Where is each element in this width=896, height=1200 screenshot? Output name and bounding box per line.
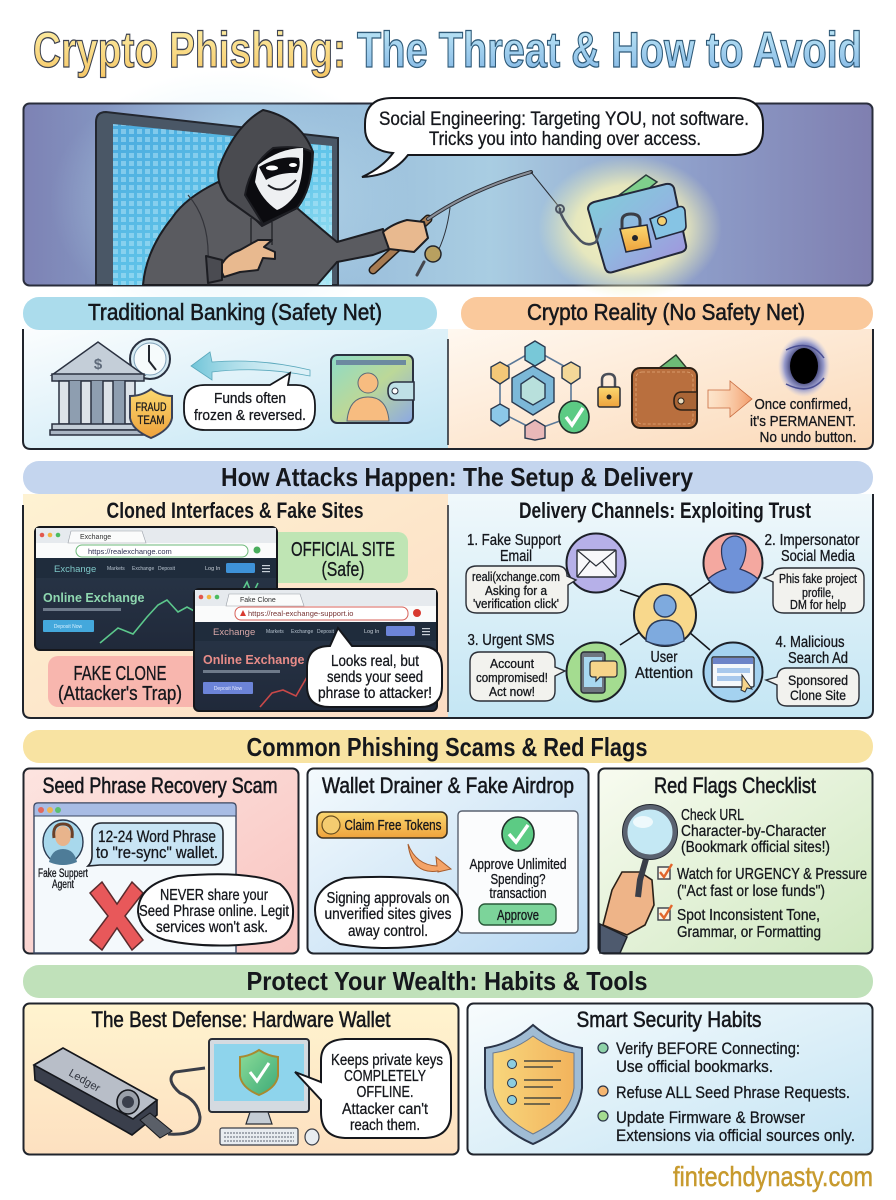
habit 1: Verify BEFORE Connecting: (616, 1039, 800, 1058)
item: watch for urgency: ("Act fast or lose funds") (677, 883, 825, 900)
wallet on hook (538, 156, 722, 300)
label: official site (262, 532, 408, 583)
panel: red flags checklist (598, 768, 872, 954)
chat bubble (88, 823, 223, 866)
browser: fake clone: Log In (364, 629, 379, 635)
channel 1: fake support email: 'verification click' (473, 597, 559, 611)
agent label (38, 868, 89, 891)
heading: crypto reality: Crypto Reality (No Safety Net) (527, 299, 805, 325)
callout: signing approvals: Signing approvals on (326, 890, 450, 907)
anonymous mask (255, 148, 303, 210)
green check badge (559, 401, 589, 433)
text: permanent warning: it's PERMANENT. (750, 413, 856, 430)
icon: blue user wallet (331, 355, 414, 423)
callout: funds frozen: frozen & reversed. (194, 407, 306, 424)
habit 3: Update Firmware & Browser (616, 1108, 805, 1127)
channel 1: fake support email: reali(xchange.com (472, 570, 560, 584)
claim free tokens button (317, 812, 447, 838)
connector lines (620, 582, 710, 650)
item: check url: Check URL (681, 807, 744, 824)
icon: computer with shield (209, 1039, 319, 1145)
browser: fake clone (194, 589, 437, 711)
hacker in hoodie (143, 110, 389, 285)
text: user attention: Attention (635, 665, 693, 682)
label: official site: OFFICIAL SITE (291, 539, 395, 561)
icon: brown wallet with cash (632, 355, 697, 428)
channel 2: impersonator social media: Phis fake project (779, 572, 857, 586)
browser: official site: Exchange (132, 566, 154, 572)
channel 3: urgent sms: Act now! (489, 684, 535, 699)
browser: fake clone: https://real-exchange-support.io (248, 609, 353, 618)
icon: shield with list (485, 1025, 582, 1144)
panel title: Seed Phrase Recovery Scam (42, 773, 278, 798)
approval dialog: transaction (490, 886, 546, 902)
callout: keeps keys offline: OFFLINE. (356, 1084, 414, 1101)
habit 1 (598, 1039, 800, 1076)
browser: official site: Online Exchange (43, 591, 144, 605)
icon: bank building: $ (94, 356, 103, 373)
item: watch for urgency (658, 864, 867, 900)
item: spot inconsistent tone: Spot Inconsistent Tone, (677, 907, 820, 924)
browser: official site: Deposit (158, 566, 176, 572)
chat bubble: to "re-sync" wallet. (96, 844, 218, 862)
panel: wallet drainer and fake airdrop (308, 768, 588, 954)
icon: fraud team shield: TEAM (138, 413, 164, 427)
panel: smart security habits (468, 1004, 872, 1154)
item: check url (681, 807, 830, 856)
claim free tokens button: Claim Free Tokens (344, 817, 442, 834)
browser: fake clone: Fake Clone (240, 597, 276, 604)
hook (560, 208, 601, 244)
speech bubble (362, 98, 763, 177)
approval dialog (458, 811, 578, 933)
browser: fake clone: Markets (266, 629, 284, 635)
section heading: common phishing scams: Common Phishing Scams & Red Flags (246, 732, 648, 762)
speech bubble: Tricks you into handing over access. (429, 129, 701, 150)
channel 3: urgent sms (468, 632, 626, 702)
icon: red x (90, 882, 143, 950)
item: spot inconsistent tone (658, 905, 821, 941)
channel 2: impersonator social media: DM for help (790, 598, 846, 612)
callout: looks real (307, 628, 442, 707)
icon: bank building (50, 342, 146, 435)
habit 2: Refuse ALL Seed Phrase Requests. (616, 1083, 850, 1102)
text: permanent warning: No undo button. (760, 429, 856, 446)
browser: official site (35, 527, 277, 650)
browser: official site: Exchange (80, 534, 111, 541)
approval dialog: Approve Unlimited (470, 857, 566, 873)
subheading: delivery channels: Delivery Channels: Exploiting Trust (519, 498, 812, 523)
browser: official site: Deposit Now (54, 624, 83, 630)
label: official site: (Safe) (322, 559, 364, 581)
icon: blockchain network (491, 341, 589, 440)
channel 2: impersonator social media: 2. Impersonator (764, 532, 860, 549)
callout: keeps keys offline: Keeps private keys (331, 1052, 443, 1069)
browser: official site: Log In (205, 566, 220, 572)
callout: funds frozen: Funds often (214, 390, 286, 407)
fishing rod (373, 172, 560, 275)
section heading: protect your wealth: Protect Your Wealth: Habits & Tools (246, 966, 648, 996)
channel 3: urgent sms: Account (490, 656, 534, 671)
habit 1: Use official bookmarks. (616, 1057, 773, 1076)
label: fake clone: (Attacker's Trap) (58, 683, 182, 705)
text: permanent warning (750, 396, 856, 446)
icon: black hole (778, 335, 830, 397)
arrow: funds reversed (191, 352, 310, 380)
channel 4: malicious search ad: 4. Malicious (776, 634, 845, 651)
channel 4: malicious search ad: Search Ad (788, 650, 848, 667)
text: permanent warning: Once confirmed, (754, 396, 852, 413)
callout: keeps keys offline (295, 1039, 451, 1138)
channel 2: impersonator social media: Social Media (781, 548, 855, 565)
icon: ledger device (34, 1048, 172, 1138)
callout: keeps keys offline: Attacker can't (342, 1101, 428, 1118)
title (33, 22, 862, 78)
item: check url: (Bookmark official sites!) (681, 839, 830, 856)
icon: user attention (634, 584, 696, 646)
browser: fake clone: Deposit (317, 629, 335, 635)
arrow: to black hole (708, 381, 752, 417)
browser: official site: Exchange (54, 564, 96, 575)
label: fake clone (48, 656, 208, 707)
usb cable (168, 1068, 205, 1134)
browser: fake clone: Exchange (291, 629, 313, 635)
panel: hardware wallet (24, 1004, 458, 1154)
panel: how attacks happen (23, 461, 873, 718)
arrow: to approval dialog (408, 844, 451, 872)
callout: keeps keys offline: COMPLETELY (344, 1068, 426, 1085)
chat bubble: 12-24 Word Phrase (98, 828, 216, 846)
channel 3: urgent sms: 3. Urgent SMS (468, 632, 554, 649)
callout: looks real: phrase to attacker! (318, 685, 432, 702)
browser: fake clone: Exchange (213, 627, 255, 638)
icon: ledger device: Ledger (67, 1067, 102, 1095)
channel 4: malicious search ad (704, 634, 859, 706)
monitor behind hacker (50, 70, 410, 330)
channel 4: malicious search ad: Clone Site (790, 687, 846, 703)
right hand gripping rod (383, 220, 428, 252)
section heading: How Attacks Happen: The Setup & Delivery (221, 462, 693, 492)
heading: crypto reality (461, 297, 873, 330)
approval dialog: Approve (497, 908, 539, 924)
callout: never share: NEVER share your (160, 887, 269, 904)
icon: padlock (598, 374, 620, 407)
fake chat window (34, 803, 236, 953)
channel 1: fake support email (466, 532, 626, 613)
channel 2: impersonator social media (704, 532, 864, 613)
channel 3: urgent sms: compromised! (476, 670, 548, 685)
panel: hero illustration (24, 70, 872, 330)
item: spot inconsistent tone: Grammar, or Formatting (677, 924, 821, 941)
heading: traditional banking: Traditional Banking (Safety Net) (88, 299, 382, 325)
padlock (620, 214, 651, 252)
callout: never share: services won't ask. (156, 919, 268, 936)
callout: signing approvals (315, 877, 462, 948)
right panel background (448, 329, 873, 449)
agent label: Agent (52, 879, 75, 891)
heading: traditional banking (23, 297, 437, 330)
habit 3 (598, 1108, 855, 1145)
section heading: protect your wealth (23, 965, 873, 998)
panel: seed phrase recovery scam (24, 768, 298, 954)
text: user attention: User (650, 649, 678, 666)
agent label: Fake Suppert (38, 868, 89, 880)
panel title: Red Flags Checklist (654, 773, 816, 798)
channel 1: fake support email: Email (500, 548, 532, 565)
callout: looks real: Looks real, but (331, 653, 420, 670)
channel 4: malicious search ad: Sponsored (788, 672, 848, 688)
browser: fake clone: Online Exchange (203, 653, 304, 667)
callout: never share: Seed Phrase online. Legit (139, 903, 289, 920)
approval dialog: Spending? (490, 872, 546, 888)
icon: fraud team shield (130, 389, 172, 438)
browser: fake clone: Deposit Now (214, 686, 243, 692)
icon: fake support agent (43, 820, 83, 865)
callout: signing approvals: unverified sites gives (324, 906, 452, 923)
label: fake clone: FAKE CLONE (74, 663, 166, 685)
icon: clock (130, 339, 170, 379)
channel 2: impersonator social media: profile, (802, 586, 834, 600)
panel title: Smart Security Habits (576, 1007, 762, 1032)
item: check url: Character-by-Character (681, 823, 827, 840)
icon: hand with magnifier (600, 804, 678, 953)
icon: fraud team shield: FRAUD (136, 400, 167, 414)
title: yellow part: Crypto Phishing: (33, 22, 346, 78)
channel 1: fake support email: Asking for a (485, 584, 547, 598)
callout: keeps keys offline: reach them. (350, 1117, 420, 1134)
habit 3: Extensions via official sources only. (616, 1126, 855, 1145)
callout: signing approvals: away control. (348, 923, 428, 940)
section heading (23, 461, 873, 494)
left hand (220, 240, 275, 277)
speech bubble: Social Engineering: Targeting YOU, not software. (379, 109, 749, 130)
panel title: Wallet Drainer & Fake Airdrop (322, 773, 574, 798)
callout: funds frozen (184, 373, 315, 430)
channel 1: fake support email: 1. Fake Support (467, 532, 562, 549)
browser: official site: https://realexchange.com (88, 547, 172, 556)
section heading: common phishing scams (23, 730, 873, 763)
subheading: cloned interfaces: Cloned Interfaces & Fake Sites (106, 498, 364, 523)
callout: never share (138, 874, 293, 946)
left panel background (23, 494, 448, 718)
left panel background (23, 329, 448, 449)
callout: looks real: sends your seed (327, 669, 423, 686)
panel title: The Best Defense: Hardware Wallet (92, 1007, 390, 1032)
right panel background (448, 494, 873, 718)
text: user attention (635, 649, 693, 682)
panel: banking vs crypto comparison (23, 297, 873, 449)
browser: official site: Markets (107, 566, 125, 572)
